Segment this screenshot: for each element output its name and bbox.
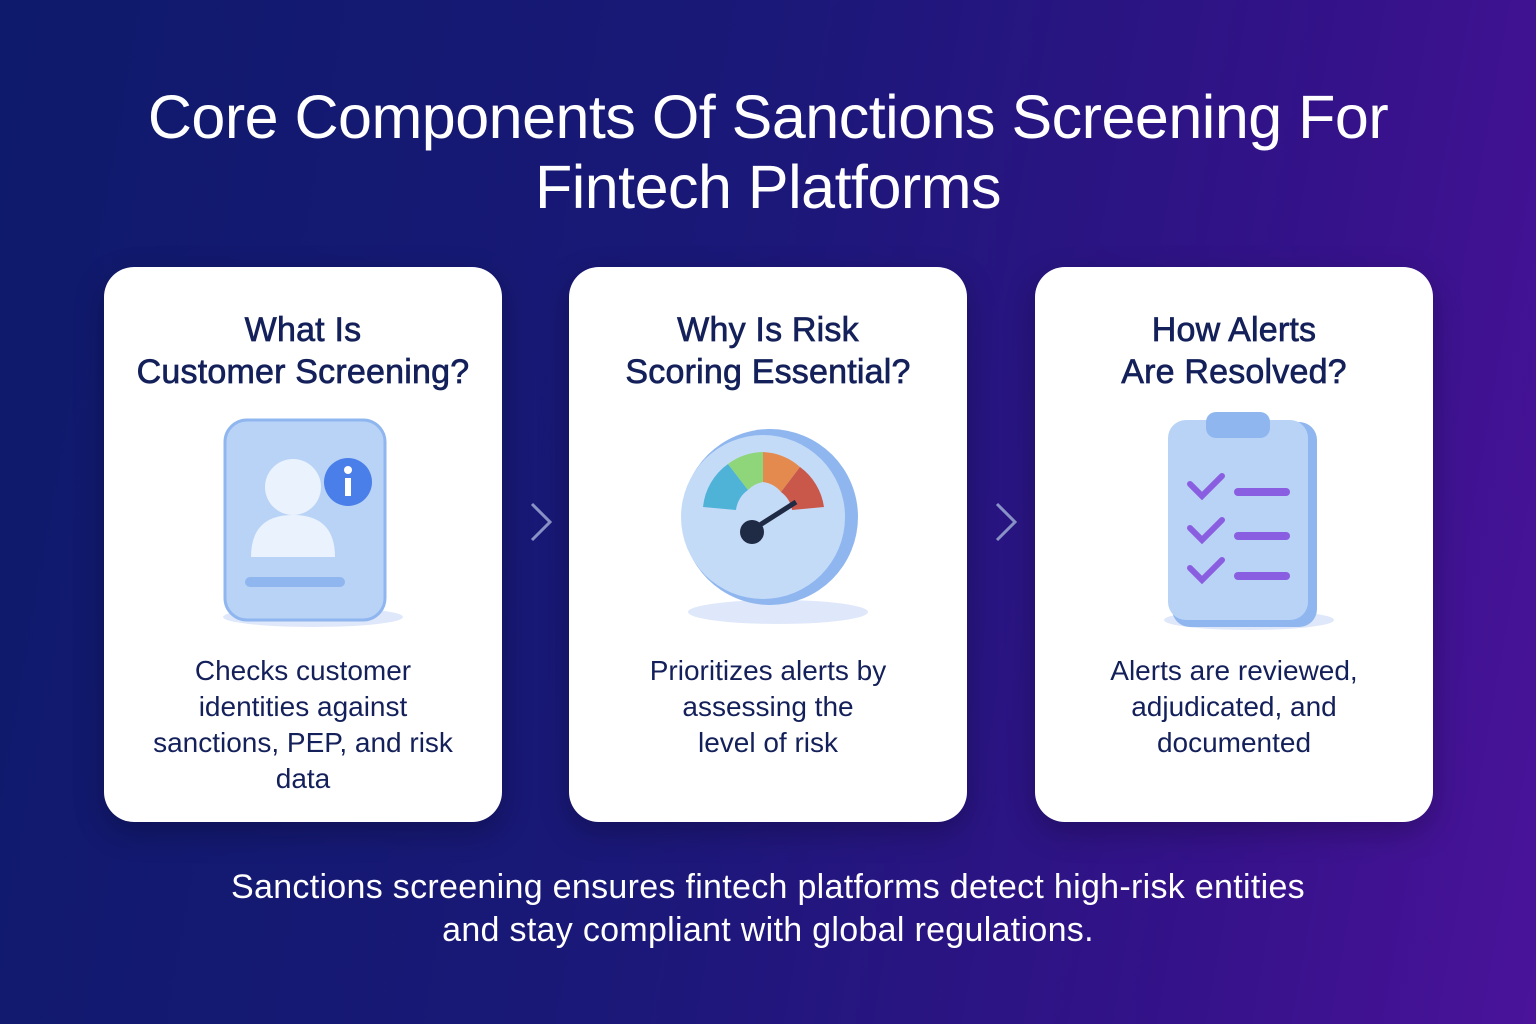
heading: Scoring Essential? xyxy=(625,353,911,391)
icon: gauge xyxy=(681,429,868,624)
description: level of risk xyxy=(698,727,838,758)
heading: Customer Screening? xyxy=(137,353,469,391)
description: assessing the xyxy=(682,691,854,722)
footer text: Sanctions screening ensures fintech platforms detect high-risk entities xyxy=(231,868,1305,906)
description: documented xyxy=(1157,727,1311,758)
description xyxy=(153,655,453,794)
title: Core Components Of Sanctions Screening For xyxy=(148,83,1388,151)
heading: How Alerts xyxy=(1152,311,1316,349)
heading: Why Is Risk xyxy=(677,311,859,349)
heading xyxy=(137,311,469,391)
panel: customer screening xyxy=(104,267,502,822)
icon: profile card xyxy=(223,418,403,627)
arrow 1 xyxy=(531,503,552,541)
footer text: and stay compliant with global regulations. xyxy=(442,911,1094,949)
description: identities against xyxy=(199,691,407,722)
description: adjudicated, and xyxy=(1131,691,1337,722)
description: sanctions, PEP, and risk xyxy=(153,727,453,758)
footer text xyxy=(231,868,1305,949)
title xyxy=(148,83,1388,221)
arrow 2 xyxy=(996,503,1017,541)
title: Fintech Platforms xyxy=(535,153,1001,221)
description: Alerts are reviewed, xyxy=(1110,655,1358,686)
description xyxy=(650,655,886,758)
heading xyxy=(625,311,911,391)
icon: clipboard xyxy=(1164,412,1334,630)
heading: What Is xyxy=(245,311,361,349)
panel: risk scoring xyxy=(569,267,967,822)
heading: Are Resolved? xyxy=(1121,353,1347,391)
description: Checks customer xyxy=(195,655,411,686)
panel: alerts resolved xyxy=(1035,267,1433,822)
description xyxy=(1110,655,1358,758)
heading xyxy=(1120,311,1347,391)
description: Prioritizes alerts by xyxy=(650,655,886,686)
description: data xyxy=(276,763,330,794)
